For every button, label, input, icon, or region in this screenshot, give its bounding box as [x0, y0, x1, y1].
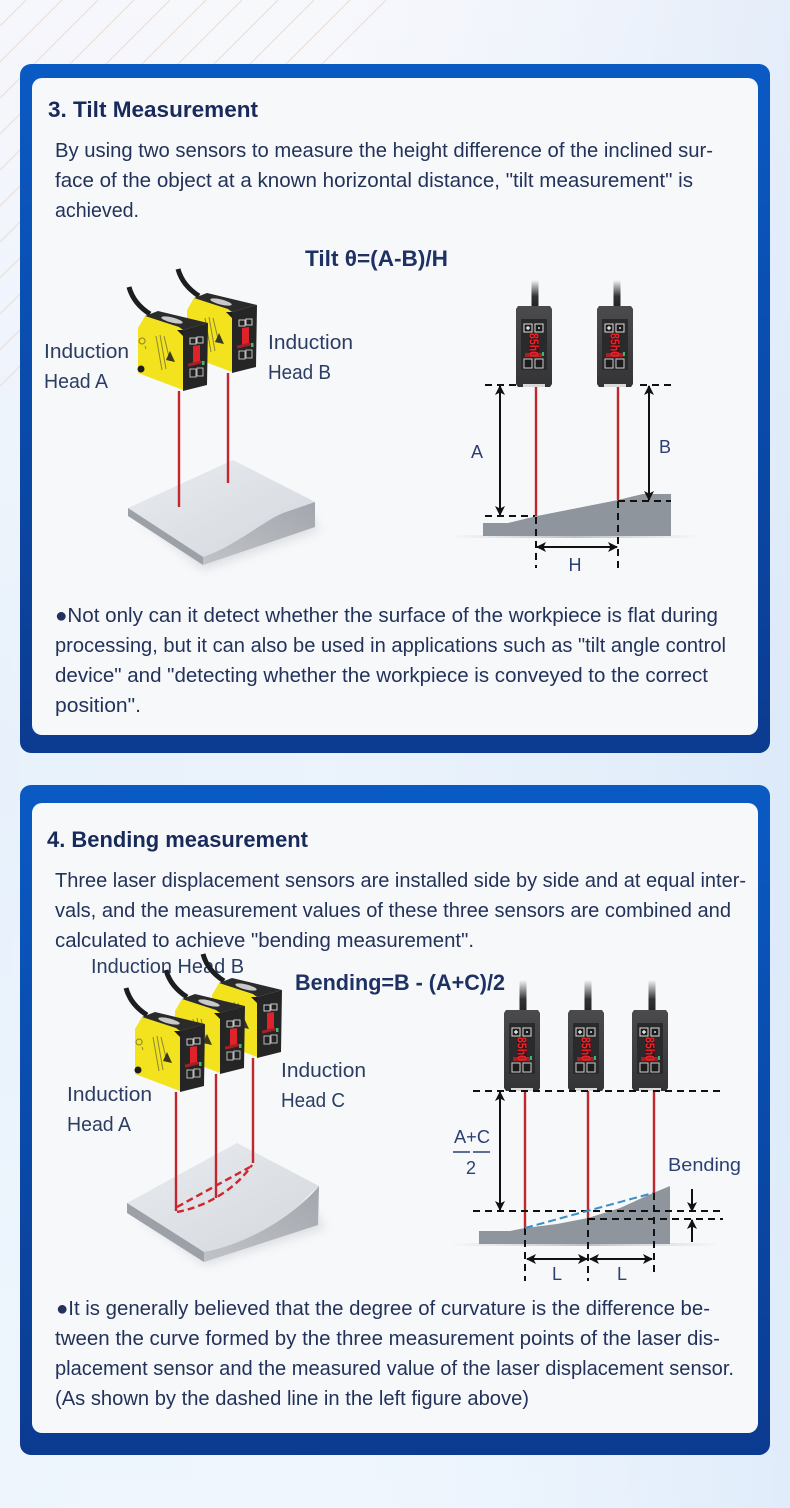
icon: sensor head B with laser — [166, 970, 245, 1198]
label: induction head C: Induction — [281, 1060, 366, 1082]
arrow: dimension B — [648, 386, 650, 500]
label: bending: Bending — [668, 1155, 741, 1175]
label: induction head B — [268, 332, 353, 384]
dashed curves on workpiece — [177, 1165, 252, 1212]
text block: bending introduction — [55, 870, 746, 952]
label: A+C over 2: A+C — [454, 1127, 490, 1147]
text block: bending introduction: calculated to achieve "bending measurement". — [55, 930, 474, 952]
arrow: dimension L right — [590, 1258, 652, 1260]
icon: sensor head A with laser — [129, 287, 208, 507]
formula: bending: Bending=B - (A+C)/2 — [295, 970, 505, 995]
icon: front sensor right: 85h0 — [642, 1037, 658, 1061]
dashed line: straight chord — [525, 1193, 653, 1228]
text block: bending introduction: vals, and the measurement values of these three sensors are combined and — [55, 900, 731, 922]
arrow: dimension A+C over 2 — [499, 1092, 501, 1210]
icon: front sensor middle — [568, 1010, 604, 1091]
arrow: bending up — [691, 1220, 693, 1242]
label: induction head A — [67, 1084, 152, 1136]
icon: front sensor left: 85h0 — [514, 1037, 530, 1061]
arrow: dimension L left — [527, 1258, 587, 1260]
label: A+C over 2 — [453, 1127, 490, 1178]
label: induction head A: Head A — [44, 371, 109, 393]
icon: front sensor right — [632, 1010, 668, 1091]
icon: front sensor right — [597, 306, 633, 387]
diagram: tilt side view — [450, 280, 700, 575]
icon: front sensor left — [516, 306, 552, 387]
label: induction head B: Head B — [268, 362, 331, 384]
arrow: dimension A — [499, 386, 501, 515]
label: A: A — [471, 442, 483, 462]
text block: bending explanation: tween the curve formed by the three measurement points of the laser dis- — [55, 1328, 720, 1350]
icon: front sensor left — [504, 1010, 540, 1091]
text block: bending explanation: placement sensor and the measured value of the laser displacement sensor. — [55, 1358, 734, 1380]
text block: tilt applications — [55, 605, 726, 717]
label: induction head A: Induction — [44, 341, 129, 363]
illustration: curved workpiece — [127, 1143, 325, 1265]
text block: tilt introduction: By using two sensors to measure the height difference of the inclined sur- — [55, 140, 713, 162]
label: L right: L — [617, 1264, 627, 1284]
text block: tilt applications: ●Not only can it detect whether the surface of the workpiece is flat during — [55, 605, 718, 627]
panel: bending measurement — [20, 785, 770, 1455]
diagram: bending side view — [450, 980, 741, 1284]
arrow: dimension H — [537, 546, 617, 548]
label: induction head A: Head A — [67, 1114, 132, 1136]
label: B: B — [659, 437, 671, 457]
label: induction head C: Head C — [281, 1090, 345, 1112]
label: induction head B: Induction Head B — [91, 956, 244, 978]
arrow: bending down — [691, 1189, 693, 1211]
text block: bending explanation: (As shown by the dashed line in the left figure above) — [55, 1388, 529, 1410]
heading: tilt measurement: 3. Tilt Measurement — [48, 97, 259, 122]
text block: bending introduction: Three laser displacement sensors are installed side by side and at equal inter- — [55, 870, 746, 892]
icon: front sensor middle: 85h0 — [578, 1037, 594, 1061]
text block: bending explanation: ●It is generally believed that the degree of curvature is the difference be- — [56, 1298, 710, 1320]
panel: tilt measurement — [20, 64, 770, 753]
text block: bending explanation — [55, 1298, 734, 1410]
icon: sensor head A with laser — [126, 988, 205, 1211]
icon: front sensor left: 85h0 — [526, 333, 542, 357]
icon: sensor head C with laser — [203, 954, 282, 1163]
label: induction head C — [281, 1060, 366, 1112]
text block: tilt introduction — [55, 140, 713, 222]
text block: tilt introduction: face of the object at a known horizontal distance, "tilt measurement" is — [55, 170, 693, 192]
label: A+C over 2: 2 — [466, 1158, 476, 1178]
label: L left: L — [552, 1264, 562, 1284]
icon: front sensor right: 85h0 — [608, 333, 622, 357]
text block: tilt applications: device" and "detecting whether the workpiece is conveyed to the correct — [55, 665, 708, 687]
text block: tilt introduction: achieved. — [55, 200, 139, 222]
formula: tilt: Tilt θ=(A-B)/H — [305, 246, 448, 271]
text block: tilt applications: processing, but it can also be used in applications such as "tilt angle control — [55, 635, 726, 657]
heading: bending measurement: 4. Bending measurement — [47, 827, 309, 852]
text block: tilt applications: position". — [55, 695, 141, 717]
label: H: H — [568, 555, 582, 575]
label: induction head B: Induction — [268, 332, 353, 354]
icon: sensor head B with laser — [178, 269, 257, 483]
label: induction head A: Induction — [67, 1084, 152, 1106]
illustration: wedge workpiece — [128, 460, 320, 570]
label: induction head A — [44, 341, 129, 393]
